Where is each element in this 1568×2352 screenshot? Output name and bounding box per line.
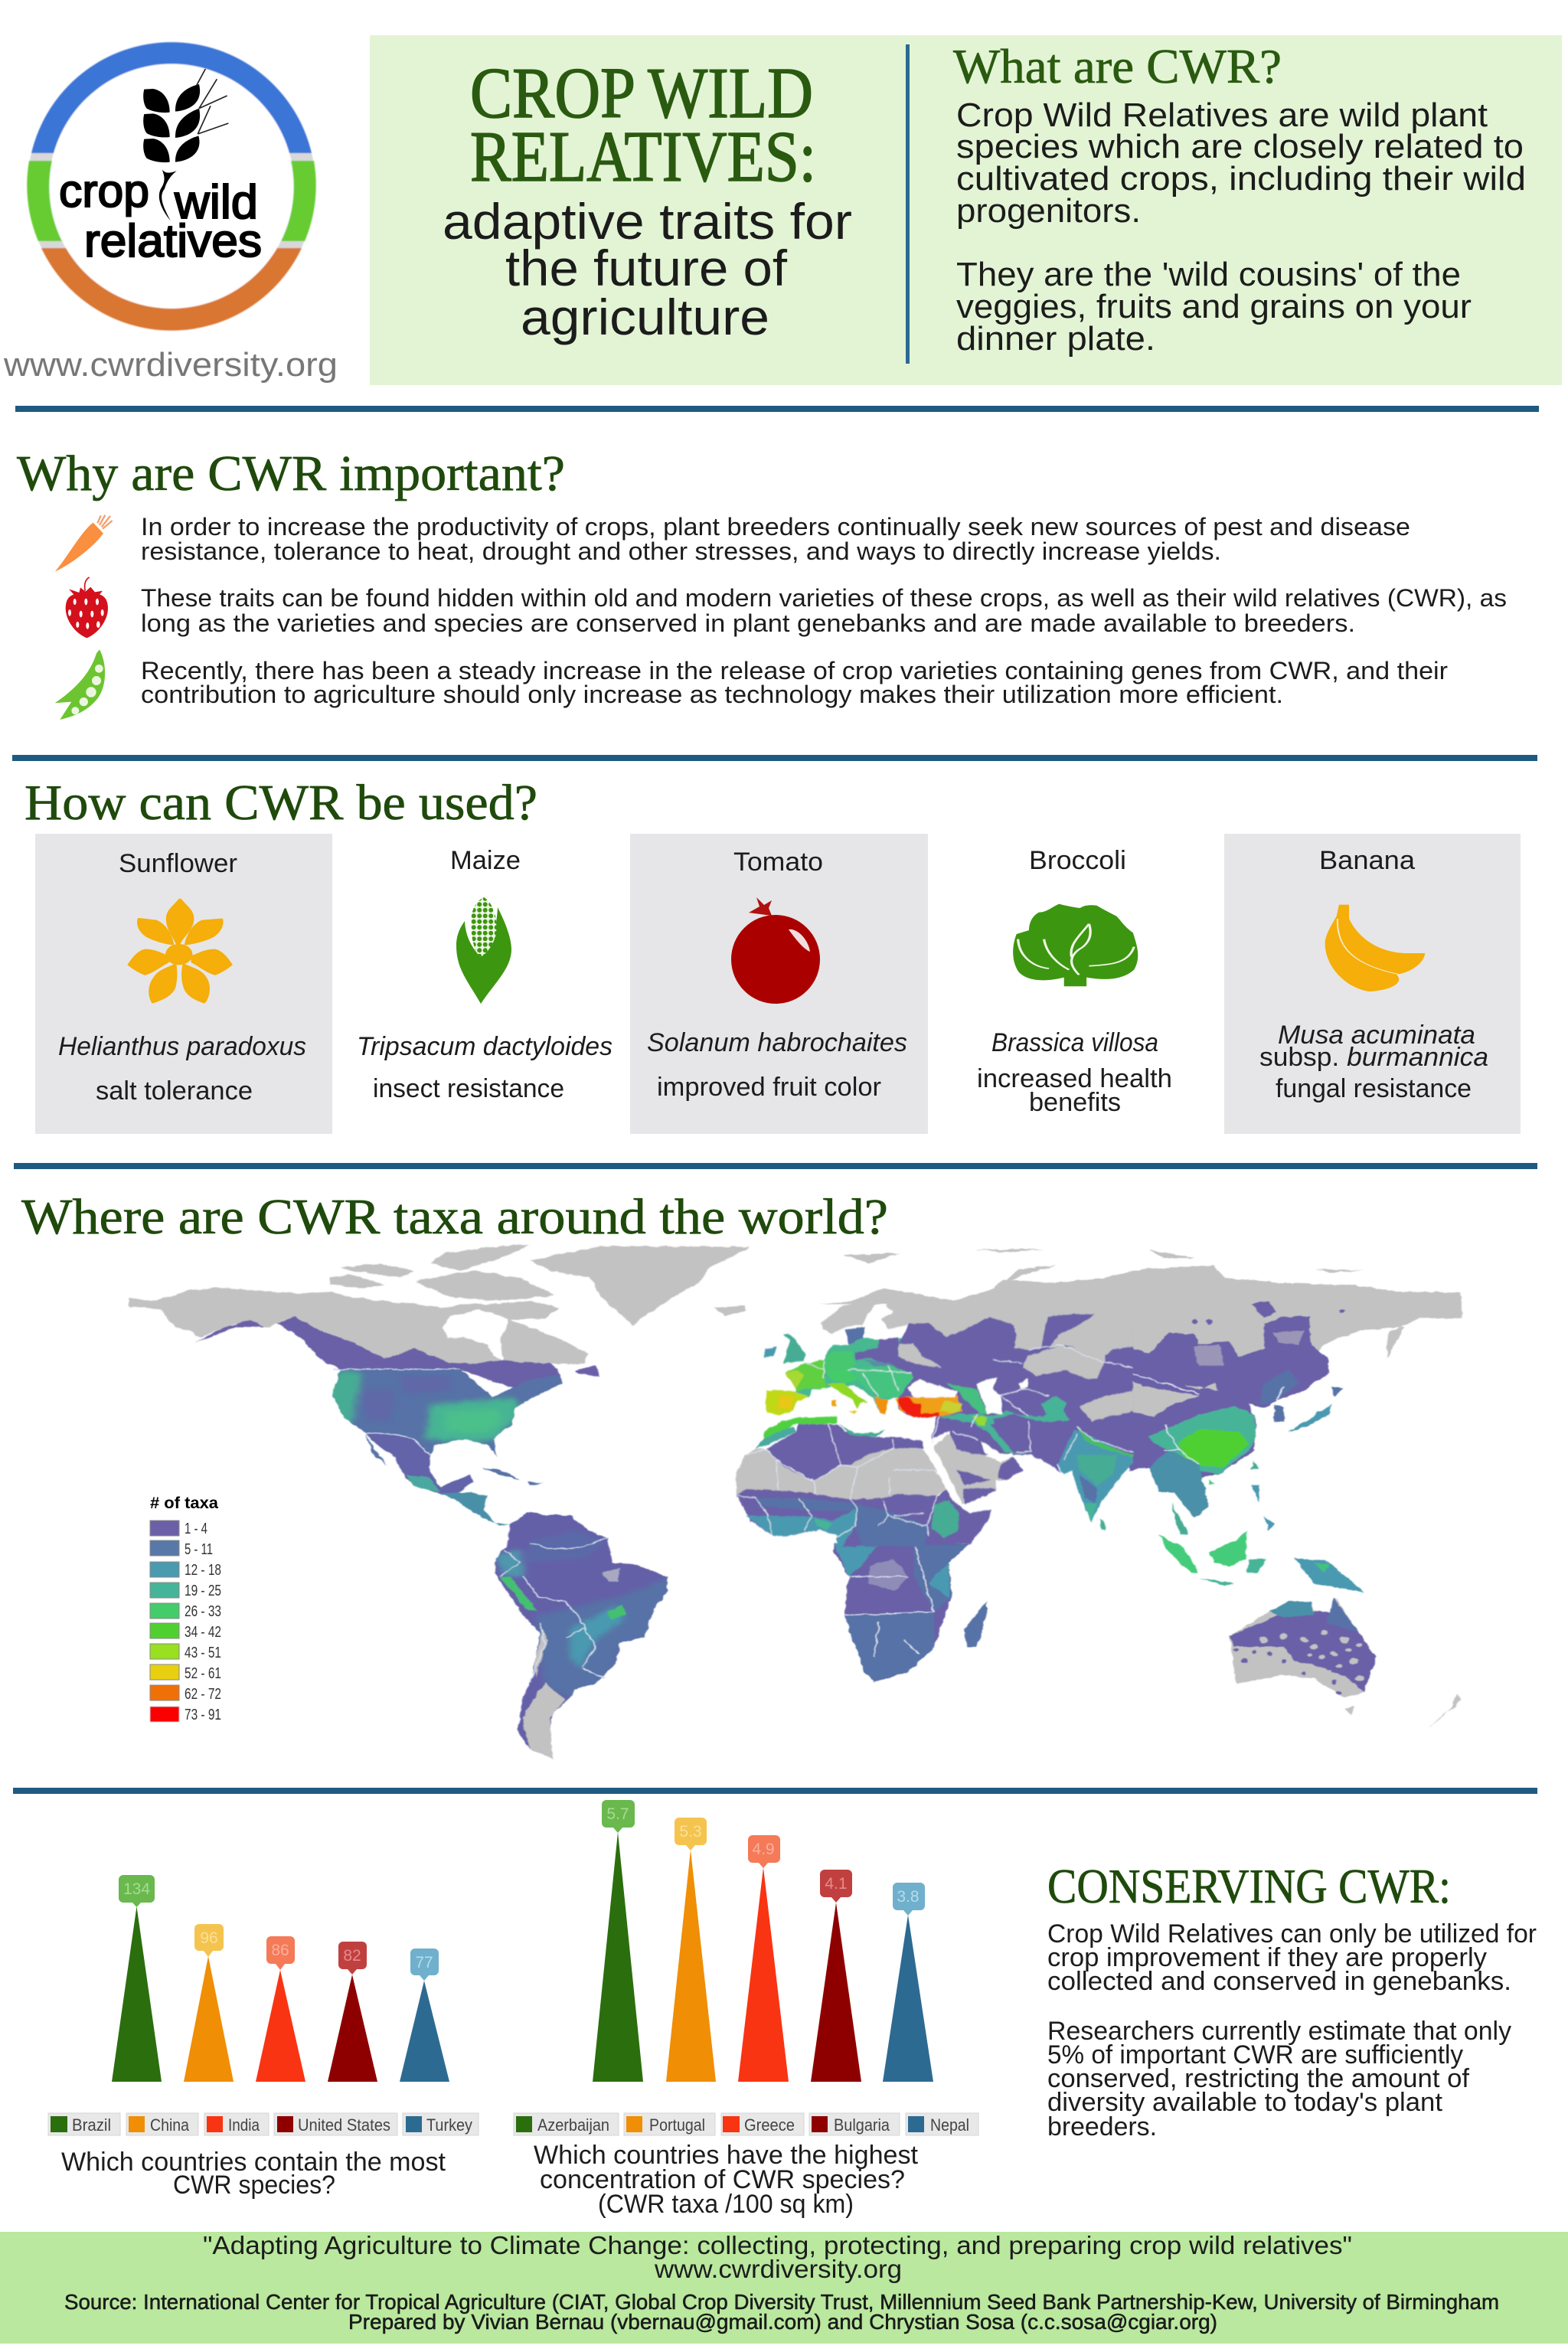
legend: Brazil [72, 2115, 111, 2135]
text: diversity available to today's plant [1047, 2088, 1443, 2117]
text: CWR definition: Crop Wild Relatives are wild plant [956, 96, 1488, 134]
card: broccoli [977, 846, 1172, 1117]
text: crop improvement if they are properly [1047, 1943, 1487, 1972]
card: maize [357, 846, 612, 1103]
value tooltips: 82 [343, 1947, 361, 1965]
citation: "Adapting Agriculture to Climate Change: collecting, protecting, and preparing crop wild relatives" [203, 2231, 1352, 2259]
text [1047, 1919, 1537, 2141]
card: broccoli: Broccoli [1029, 846, 1126, 875]
heading: what are CWR: What are CWR? [953, 39, 1282, 93]
card: maize: Maize [450, 846, 521, 875]
legend: number of taxa: 1 - 4 [185, 1521, 207, 1537]
chart: highest concentration of CWR species [514, 1800, 978, 2219]
value tooltips [119, 1875, 439, 1981]
icon: corn [456, 897, 511, 1004]
title: CROP WILD [470, 54, 813, 133]
text: CWR definition: cultivated crops, including their wild [956, 160, 1526, 198]
card: tomato [630, 834, 928, 1134]
card: tomato: Tomato [733, 848, 823, 877]
text: productivity [141, 513, 1410, 565]
legend: number of taxa: 12 - 18 [185, 1562, 221, 1579]
card: sunflower: Helianthus paradoxus [58, 1032, 306, 1061]
footer band [0, 2231, 1568, 2344]
text: traits [141, 584, 1507, 637]
legend: Greece [744, 2115, 795, 2135]
legend: Bulgaria [834, 2115, 890, 2135]
map: americas [129, 1244, 750, 1759]
map: europe, north africa, middle east [737, 1302, 1133, 1547]
icon: strawberry [66, 577, 108, 638]
caption [61, 2148, 446, 2200]
caption: Which countries have the highest [534, 2141, 919, 2170]
value tooltips [602, 1800, 925, 1916]
value tooltips: 3.8 [897, 1888, 920, 1906]
heading: Why are CWR important? [17, 446, 565, 501]
title: RELATIVES: [470, 117, 816, 197]
value tooltips: 4.9 [752, 1841, 775, 1858]
legend: number of taxa: 19 - 25 [185, 1583, 221, 1599]
text: traits: long as the varieties and species are conserved in plant genebanks and are made available to breeders. [141, 609, 1355, 637]
card: tomato: improved fruit color [657, 1073, 881, 1102]
sources [64, 2290, 1499, 2334]
icon: tomato [731, 897, 820, 1004]
citation: www.cwrdiversity.org [654, 2255, 902, 2283]
text: collected and conserved in genebanks. [1047, 1967, 1511, 1996]
legend: number of taxa: 73 - 91 [185, 1707, 221, 1723]
icon: pea pod [55, 649, 105, 720]
legend: Portugal [649, 2115, 705, 2135]
panel: header [370, 35, 1562, 385]
caption [534, 2141, 919, 2219]
panel: world map section [21, 1189, 1462, 1759]
value tooltips: 4.1 [825, 1875, 848, 1893]
legend: China [150, 2115, 190, 2135]
text: CWR definition: progenitors. [956, 192, 1141, 230]
value tooltips: 96 [200, 1929, 218, 1947]
text: 5% of important CWR are sufficiently [1047, 2040, 1463, 2069]
icon: banana [1325, 905, 1425, 991]
legend: number of taxa [150, 1494, 221, 1723]
text: CWR definition: dinner plate. [956, 320, 1155, 358]
sources: Prepared by Vivian Bernau (vbernau@gmail.com) and Chrystian Sosa (c.c.sosa@cgiar.org) [348, 2310, 1217, 2334]
heading: Where are CWR taxa around the world? [21, 1189, 888, 1245]
map: east asia, southern africa, oceania [821, 1250, 1462, 1728]
card: maize: insect resistance [373, 1074, 564, 1103]
bars [112, 1906, 449, 2082]
caption: CWR species? [173, 2171, 335, 2200]
panel: how can CWR be used [24, 775, 1521, 1134]
caption: concentration of CWR species? [540, 2165, 905, 2194]
panel: why are CWR important [17, 446, 1507, 720]
card: banana: fungal resistance [1276, 1074, 1472, 1103]
heading: CONSERVING CWR: [1047, 1859, 1451, 1913]
card: banana [1224, 834, 1521, 1134]
bars [593, 1832, 933, 2082]
text: recent releases: contribution to agriculture should only increase as technology makes their utilization more efficient. [141, 681, 1283, 708]
legend: India [228, 2115, 260, 2135]
card: broccoli: increased health [977, 1064, 1172, 1093]
legend: number of taxa: 43 - 51 [185, 1645, 221, 1661]
text: CWR definition: veggies, fruits and grains on your [956, 288, 1472, 325]
card: sunflower: Sunflower [119, 849, 237, 878]
title [470, 54, 816, 197]
value tooltips: 86 [271, 1942, 289, 1959]
card: sunflower: salt tolerance [96, 1076, 253, 1106]
value tooltips: 134 [123, 1880, 150, 1898]
logo wordmark: relatives [84, 215, 262, 266]
card: banana: Banana [1319, 846, 1415, 875]
card: sunflower [35, 834, 332, 1134]
text: productivity: resistance, tolerance to heat, drought and other stresses, and ways to directly increase yields. [141, 537, 1221, 565]
logo wordmark: crop [59, 165, 149, 217]
legend: number of taxa: 52 - 61 [185, 1665, 221, 1682]
legend [48, 2113, 479, 2135]
text: conserved, restricting the amount of [1047, 2064, 1470, 2093]
card: banana: Musa acuminata [1278, 1021, 1475, 1050]
sources: Source: International Center for Tropical Agriculture (CIAT, Global Crop Diversity Trust, Millennium Seed Bank Partnership-Kew, University of Birmingham [64, 2290, 1499, 2314]
value tooltips: 5.7 [606, 1805, 629, 1823]
subtitle: agriculture [521, 289, 769, 345]
logo: crop wild relatives [3, 42, 338, 384]
text: CWR definition: They are the 'wild cousins' of the [956, 256, 1461, 293]
world map [129, 1244, 1462, 1759]
text: traits: These traits can be found hidden within old and modern varieties of these crops, as well as their wild relatives (CWR), as [141, 584, 1507, 612]
caption: (CWR taxa /100 sq km) [598, 2190, 854, 2219]
subtitle: the future of [505, 240, 788, 296]
legend: Nepal [930, 2115, 969, 2135]
legend: number of taxa: 5 - 11 [185, 1541, 213, 1558]
website url: www.cwrdiversity.org [3, 346, 338, 384]
value tooltips: 77 [415, 1954, 433, 1971]
logo ring [27, 42, 316, 331]
value tooltips: 5.3 [679, 1823, 702, 1841]
legend: United States [298, 2115, 390, 2135]
card: banana: subsp. burmannica [1259, 1043, 1488, 1072]
legend: number of taxa: 34 - 42 [185, 1624, 221, 1641]
icon: carrot [55, 515, 113, 572]
legend [514, 2113, 978, 2135]
logo wordmark: wild [174, 176, 258, 229]
text: Crop Wild Relatives can only be utilized for [1047, 1919, 1537, 1949]
legend: Turkey [426, 2115, 472, 2135]
text: CWR definition [956, 96, 1526, 358]
logo wordmark [59, 165, 262, 266]
legend: number of taxa: 26 - 33 [185, 1603, 221, 1620]
text: CWR definition: species which are closely related to [956, 128, 1524, 165]
icon: wheat ear [143, 69, 228, 220]
chart: countries with most CWR species [48, 1875, 479, 2200]
legend: number of taxa: # of taxa [150, 1494, 218, 1512]
subtitle: adaptive traits for [443, 193, 852, 250]
text: breeders. [1047, 2112, 1157, 2141]
card: broccoli: benefits [1029, 1088, 1121, 1117]
text: productivity: In order to increase the productivity of crops, plant breeders continually seek new sources of pest and disease [141, 513, 1410, 541]
text: Researchers currently estimate that only [1047, 2017, 1511, 2046]
subtitle [443, 193, 852, 345]
icon: broccoli [1013, 904, 1138, 986]
panel: conserving CWR [1047, 1859, 1537, 2141]
text: recent releases [141, 657, 1448, 708]
legend: Azerbaijan [537, 2115, 609, 2135]
citation [203, 2231, 1352, 2283]
card: broccoli: Brassica villosa [991, 1028, 1158, 1057]
caption: Which countries contain the most [61, 2148, 446, 2177]
text: recent releases: Recently, there has been a steady increase in the release of crop varieties containing genes from CWR, and their [141, 657, 1448, 684]
heading: How can CWR be used? [24, 775, 537, 831]
legend: number of taxa: 62 - 72 [185, 1686, 221, 1703]
icon: sunflower [129, 900, 231, 1002]
card: maize: Tripsacum dactyloides [357, 1032, 612, 1061]
card: tomato: Solanum habrochaites [647, 1028, 907, 1057]
